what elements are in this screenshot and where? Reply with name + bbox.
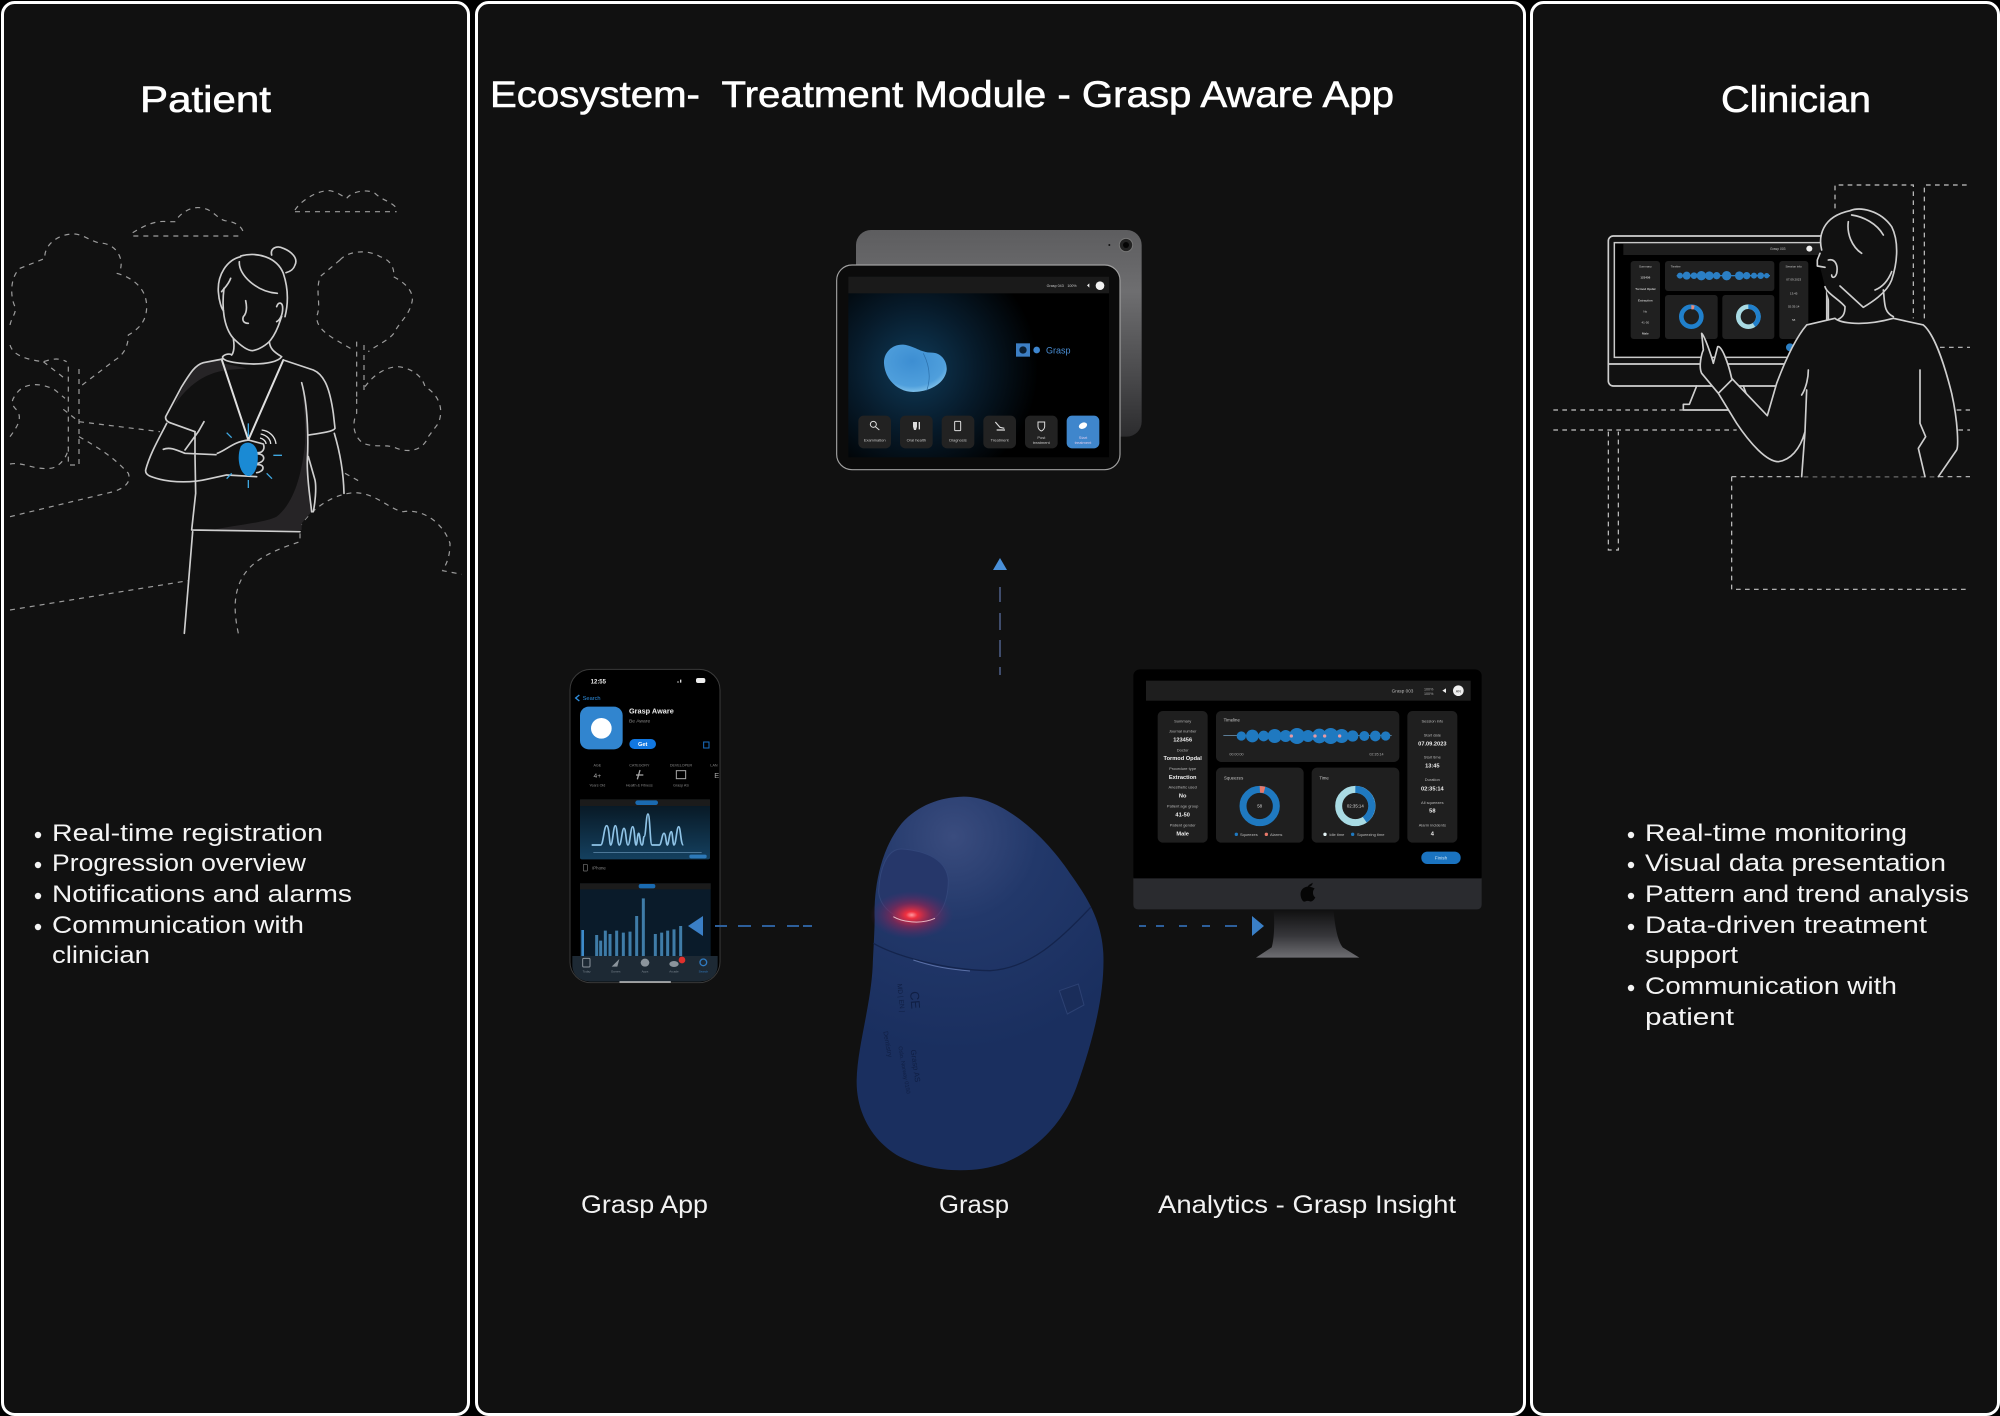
monitor: 13:45	[1790, 291, 1798, 295]
donut chart: squeezes: Squeezes	[1240, 832, 1258, 837]
session info card: 02:35:14	[1421, 786, 1444, 792]
bullet list: clinician: Pattern and trend analysis	[1645, 881, 1969, 908]
dashed background: trees, clouds and hills	[10, 191, 462, 633]
logo emboss	[1059, 984, 1084, 1014]
imac: grasp insight: 100%	[1424, 692, 1434, 696]
embossed product text	[881, 983, 922, 1094]
tablet: treatment module	[837, 230, 1142, 470]
panel: patient	[2, 2, 468, 1414]
panel: clinician	[1532, 2, 1998, 1414]
bullet list: patient: Notifications and alarms	[52, 881, 352, 908]
monitor: 07.09.2023	[1786, 278, 1801, 282]
tab bar: Apps	[642, 969, 649, 973]
finish button	[1421, 852, 1461, 864]
donut chart: squeezes: Alarms	[1270, 832, 1282, 837]
monitor: Tormod Opdal	[1635, 287, 1656, 291]
summary card: Doctor	[1177, 747, 1189, 752]
donut chart: squeezes: 58	[1257, 804, 1263, 809]
red status light	[870, 891, 953, 939]
summary card: 123456	[1173, 737, 1192, 743]
monitor: Summary	[1639, 264, 1652, 268]
phone: grasp app: 4+	[594, 773, 601, 780]
menu buttons: treatment	[1033, 440, 1051, 445]
phone: grasp app: LAN	[710, 763, 718, 767]
embossed product text: CE	[907, 991, 922, 1009]
menu buttons: Start	[1079, 435, 1088, 440]
summary card: Patient age group	[1167, 803, 1199, 808]
embossed product text: Dentistry	[881, 1031, 893, 1059]
imac: grasp insight: 100%	[1424, 687, 1434, 691]
phone: grasp app: Years Old	[589, 783, 605, 787]
icon: grasp device rendering	[884, 345, 947, 392]
monitor: Male	[1642, 332, 1649, 336]
icon: apple logo	[1301, 883, 1315, 902]
monitor: 123456	[1640, 276, 1651, 280]
menu buttons: treatment	[1075, 440, 1092, 445]
embossed product text: MD | EN |	[895, 983, 905, 1013]
illustration: patient holding grasp device	[10, 191, 462, 633]
finish button: Finish	[1435, 856, 1448, 861]
phone: grasp app: Get	[638, 742, 647, 748]
session info card: Start date	[1424, 732, 1442, 737]
bullet list: clinician: Real-time monitoring	[1645, 820, 1907, 847]
phone: grasp app: Be Aware	[629, 719, 650, 725]
phone: grasp app: DEVELOPER	[670, 763, 693, 767]
summary card: Tormod Opdal	[1164, 756, 1202, 762]
donut chart: time: Time	[1319, 775, 1329, 780]
donut chart: squeezes: Squeezes	[1224, 775, 1243, 780]
session info card: 4	[1431, 831, 1435, 837]
summary card: Summary	[1174, 719, 1191, 724]
bullet list: clinician: Data-driven treatment	[1645, 912, 1927, 939]
summary card: Anesthetic used	[1168, 785, 1197, 790]
imac: grasp insight	[1133, 669, 1482, 958]
menu buttons: Oral health	[907, 438, 926, 443]
bullet list: clinician: patient	[1645, 1004, 1734, 1031]
tablet: treatment module: 100%	[1067, 284, 1077, 288]
summary card: 41-50	[1175, 813, 1190, 819]
monitor: 02:35:14	[1788, 305, 1800, 309]
session info card: Start time	[1424, 755, 1442, 760]
tab bar: Arcade	[669, 969, 679, 973]
monitor: Timeline	[1671, 264, 1681, 268]
arrow: up to tablet	[993, 558, 1007, 675]
logo: grasp	[1016, 343, 1070, 357]
bullet list: patient	[35, 820, 352, 969]
donut chart: time: Squeezing time	[1357, 832, 1385, 837]
timeline card: 00:00:00	[1229, 752, 1244, 756]
phone: grasp app: E	[714, 771, 719, 780]
donut chart: time: Idle time	[1329, 832, 1345, 837]
phone: grasp app: 12:55	[591, 679, 607, 685]
arrow: left to phone	[688, 916, 812, 936]
summary card: Extraction	[1169, 775, 1197, 781]
clinician figure	[1700, 209, 1958, 477]
session info card: Alarm incidents	[1419, 822, 1446, 827]
icon: blue grasp device with rays	[227, 423, 282, 488]
tab bar: Games	[611, 969, 621, 973]
bullet list: clinician: Visual data presentation	[1645, 850, 1946, 877]
session info card: 13:45	[1425, 763, 1440, 769]
phone: grasp app: CATEGORY	[629, 763, 650, 767]
menu buttons: Diagnosis	[949, 438, 967, 443]
monitor: No	[1643, 310, 1648, 314]
session info card: Duration	[1425, 777, 1440, 782]
tab bar: Today	[583, 969, 591, 973]
monitor: 41-50	[1642, 321, 1649, 325]
dashed background: room and desk	[1553, 185, 1970, 589]
bullet list: clinician: support	[1645, 942, 1738, 969]
menu buttons: Treatment	[991, 438, 1010, 443]
bullet list: clinician	[1628, 820, 1969, 1031]
summary card: Journal number	[1169, 729, 1197, 734]
tab bar	[572, 956, 718, 983]
session info card: 07.09.2023	[1418, 741, 1446, 747]
heading: ecosystem: Ecosystem- Treatment Module - Grasp Aware App	[490, 74, 1394, 115]
session info card: 58	[1429, 809, 1435, 815]
icon: app tile	[580, 707, 623, 749]
monitor	[1608, 236, 1828, 410]
arrow: right to imac	[1139, 916, 1264, 936]
summary card	[1158, 711, 1208, 843]
bullet list: patient: Real-time registration	[52, 820, 323, 847]
phone: grasp app: Grasp AS	[673, 783, 689, 787]
phone: grasp app: Grasp Aware	[629, 707, 674, 716]
donut chart: squeezes	[1216, 768, 1304, 843]
label: grasp app: Grasp App	[581, 1191, 708, 1219]
phone: grasp app: AGE	[593, 763, 602, 767]
shirt shadows	[174, 359, 312, 531]
donut chart: time	[1312, 768, 1399, 843]
monitor: Grasp 003	[1770, 247, 1786, 251]
timeline card: Timeline	[1224, 718, 1240, 723]
summary card: Procedure type	[1169, 766, 1197, 771]
illustration: clinician at monitor	[1553, 185, 1970, 589]
session info card: All squeezes	[1421, 800, 1444, 805]
menu buttons: Examination	[864, 438, 886, 443]
bar chart: app screenshot two	[580, 883, 711, 957]
imac: grasp insight: Grasp 003	[1392, 689, 1414, 694]
monitor: Extraction	[1638, 298, 1653, 302]
bullet list: patient: Progression overview	[52, 850, 307, 877]
monitor: 58	[1792, 318, 1796, 322]
bullet list: clinician: Communication with	[1645, 973, 1897, 1000]
summary card: No	[1179, 794, 1187, 800]
grasp device	[857, 797, 1103, 1170]
bullet list: patient: clinician	[52, 942, 150, 969]
tab bar: Search	[699, 969, 708, 973]
menu buttons: Post	[1037, 435, 1046, 440]
panel: ecosystem treatment module	[476, 2, 1524, 1414]
summary card: Male	[1176, 831, 1189, 837]
heading: patient: Patient	[140, 79, 272, 120]
session info card: Session info	[1421, 718, 1444, 723]
timeline card	[1216, 711, 1399, 762]
phone: grasp app	[570, 669, 720, 983]
heading: clinician: Clinician	[1721, 79, 1871, 120]
label: grasp: Grasp	[939, 1191, 1009, 1219]
line chart: app screenshot one	[580, 799, 710, 859]
donut chart: time: 02:35:14	[1347, 804, 1364, 809]
stand	[1256, 908, 1359, 958]
embossed product text: Grasp AS	[909, 1049, 922, 1083]
summary card: Patient gender	[1170, 823, 1196, 828]
tablet: treatment module: Grasp 043	[1047, 284, 1064, 288]
menu buttons	[858, 416, 1099, 448]
timeline card: 02:35:14	[1369, 752, 1384, 756]
phone: grasp app: Health & Fitness	[626, 783, 653, 787]
session info card	[1407, 711, 1457, 843]
phone: grasp app: Search	[583, 696, 601, 702]
figure outline	[146, 247, 344, 633]
bullet list: patient: Communication with	[52, 912, 304, 939]
monitor: Session info	[1786, 264, 1802, 268]
logo: grasp: Grasp	[1046, 345, 1070, 355]
embossed product text: Oslo, Norway 0150	[896, 1046, 911, 1094]
imac: grasp insight: AN	[1456, 689, 1461, 693]
phone: grasp app: iPhone	[592, 865, 606, 870]
label: analytics: Analytics - Grasp Insight	[1158, 1191, 1456, 1219]
